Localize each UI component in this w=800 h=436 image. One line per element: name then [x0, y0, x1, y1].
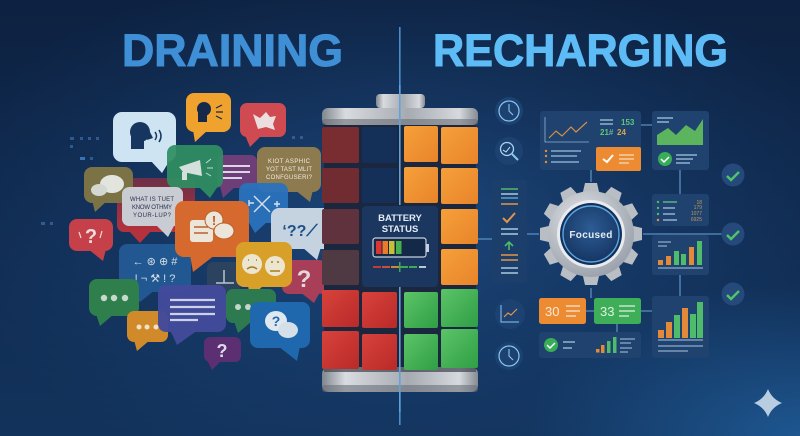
title: Recharging: RECHARGING: [433, 25, 728, 76]
icon: clock bottom: [495, 342, 523, 370]
bubble: red scribble: [240, 103, 286, 147]
connector lines: [478, 125, 723, 332]
panel: top line chart: [540, 111, 641, 171]
panel: bar chart mid: [652, 235, 709, 275]
title: Draining: DRAINING: [122, 25, 343, 76]
bubble: white question text: WHAT IS TUET: [130, 197, 174, 203]
panel: table: 18: [696, 200, 702, 206]
panel: bottom summary: [539, 332, 641, 358]
icon: check two: [722, 222, 744, 246]
bubble: blue cross: [239, 183, 288, 233]
bubble: olive chat: [84, 167, 133, 212]
bubble: purple question: ?: [216, 341, 228, 361]
decorative dots: [41, 136, 303, 225]
chip: orange check: [596, 147, 641, 171]
bubble: purple lines: [217, 155, 257, 198]
icon: magnifier: [495, 137, 523, 165]
panel: table: [652, 194, 709, 226]
bubble: blue symbols: ← ⊛ ⊕ #: [133, 256, 178, 268]
panel: recharging dashboard: [492, 97, 744, 370]
icon: chart circle: [495, 299, 525, 329]
bubble: white question text: YOUR-LUP?: [133, 213, 172, 219]
icon: check three: [722, 282, 744, 306]
bubble: white question text: [122, 187, 183, 237]
chip: orange 30: 30: [545, 304, 559, 319]
bubble: blue symbols: ! ¬ ⚒ ! ?: [135, 273, 175, 285]
panel: table: 6925: [691, 217, 702, 223]
icon: sparkle: [754, 389, 782, 417]
battery status panel: [362, 206, 438, 287]
icon: check one: [722, 164, 744, 186]
bubble: tan question text: CONFGUSERI?: [266, 175, 313, 181]
chip: green 33: [594, 298, 641, 324]
bubble: rose question: ?: [297, 266, 311, 293]
bubble: green dots: [89, 279, 139, 326]
bubble: blue question chat: ?: [272, 313, 280, 329]
panel: top line chart: 24: [617, 128, 626, 137]
bubble: tan question text: YOT TAST MLIT: [266, 167, 312, 173]
panel: top line chart: 153: [621, 118, 635, 127]
battery status panel: STATUS: [382, 224, 418, 235]
bubble: rose question: [282, 260, 326, 303]
bubble: white symbols: ʻ??⟋: [282, 223, 318, 240]
battery: [322, 94, 478, 392]
panel: table: 1077: [691, 211, 702, 217]
panel: area chart: [652, 111, 709, 170]
panel: top line chart: 21#: [600, 128, 614, 137]
icon: clock top: [495, 97, 523, 125]
panel: left checklist: [492, 180, 527, 283]
chip: orange 30: [539, 298, 586, 324]
battery bottom rim: [322, 367, 478, 392]
left cells: [322, 127, 397, 370]
battery status panel: BATTERY: [378, 213, 423, 224]
bubble: maroon back: [117, 178, 195, 243]
battery body: [324, 120, 476, 372]
center divider: [399, 27, 401, 425]
bubble: yellow faces: [236, 242, 292, 298]
bubble: purple lines large: [158, 285, 226, 345]
bubble: red question: [69, 219, 113, 261]
bubble: orange dots: [127, 311, 168, 351]
battery top rim: [322, 108, 478, 125]
gear: Focused: Focused: [569, 230, 613, 241]
panel: table: 179: [694, 205, 702, 211]
bubble: speaking head: [113, 112, 176, 173]
gear: Focused: [540, 183, 642, 285]
bubble: white question text: KNOW OTHMY: [132, 205, 172, 211]
panel: bar chart large: [652, 296, 709, 358]
bubble: white symbols: [271, 208, 333, 260]
bubble: green megaphone: [167, 145, 223, 198]
bubble: blue symbols: [119, 244, 191, 302]
bubble: tan question text: [257, 147, 321, 202]
bubble: tan question text: KIOT ASPHIC: [268, 159, 311, 165]
divider segment over battery: [399, 85, 401, 412]
right cells: [404, 126, 478, 370]
chip: green 33: 33: [600, 304, 614, 319]
bubble: green dots two: [226, 289, 276, 333]
bubble: purple question: [204, 337, 241, 370]
battery cap: [376, 94, 425, 108]
bubble: orange head: [186, 93, 231, 142]
panel: draining speech bubbles: [69, 93, 333, 370]
bubble: orange central: !: [212, 213, 216, 228]
bubble: orange central: [175, 201, 249, 272]
bubble: dark slate: [207, 262, 240, 292]
bubble: red question: ?: [85, 226, 97, 248]
bubble: blue question chat: [250, 302, 310, 361]
